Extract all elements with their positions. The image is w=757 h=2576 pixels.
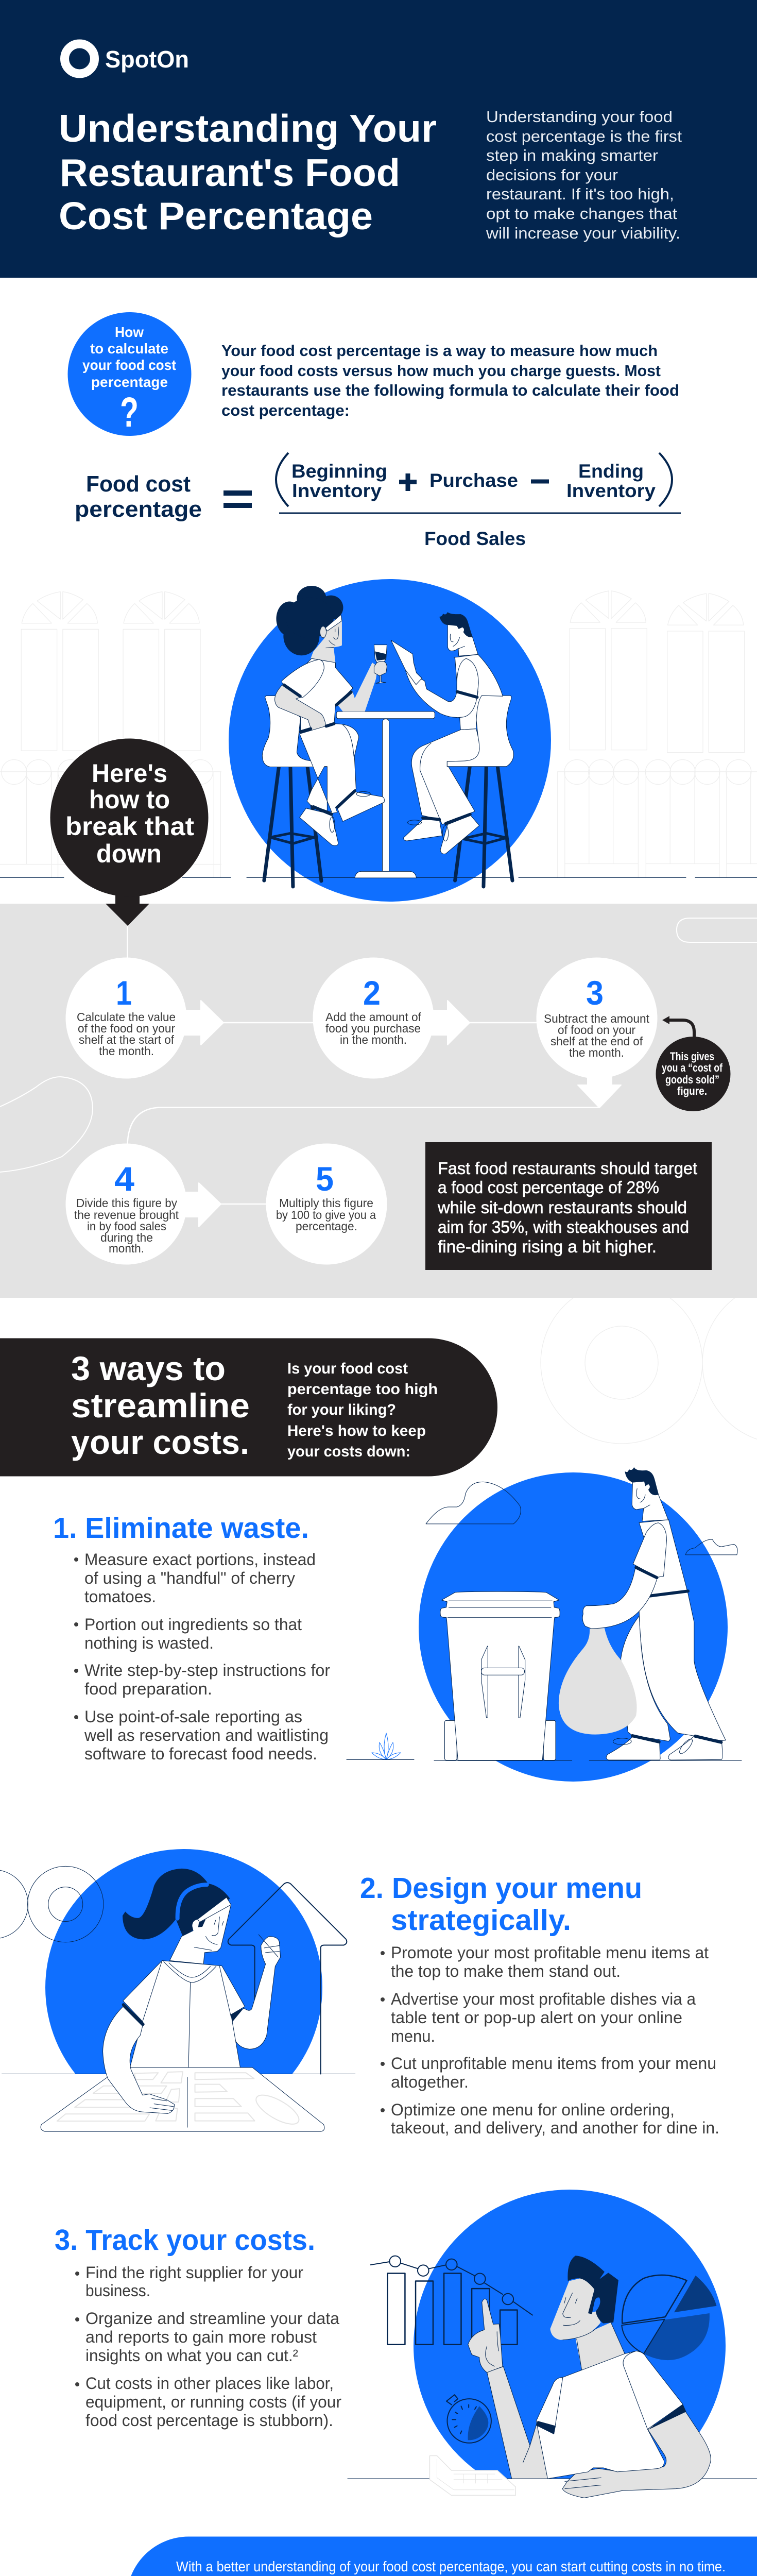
bullet list: eliminate waste (74, 1550, 330, 1763)
banner: 3 ways to streamline your costs: streamline (71, 1386, 250, 1425)
bullet list: design your menu: altogether. (391, 2073, 469, 2091)
bullet list: track your costs: food cost percentage is stubborn). (85, 2411, 333, 2430)
bullet list: design your menu: takeout, and delivery, and another for dine in. (391, 2119, 719, 2137)
bullet list: eliminate waste: Write step-by-step instructions for (84, 1661, 330, 1680)
banner: 3 ways to streamline your costs: Is your food cost (287, 1360, 408, 1377)
arrow: step 2 to 3 (430, 1001, 470, 1045)
bullet list: eliminate waste: tomatoes. (84, 1587, 156, 1606)
header intro text (486, 108, 682, 242)
arrow: step 3 to 4 (578, 1074, 621, 1108)
title: Restaurant's Food (60, 151, 400, 194)
callout: how to calculate: ? (120, 389, 139, 436)
step 3: the month. (569, 1046, 624, 1059)
bullet list: eliminate waste: Portion out ingredients so that (84, 1615, 302, 1634)
text block: formula intro (221, 342, 679, 419)
decoration: faint rings (541, 1282, 757, 1444)
chart: bars and trend line (371, 2256, 532, 2345)
step 1 (66, 957, 186, 1079)
bullet list: track your costs: insights on what you can cut.² (85, 2346, 298, 2365)
step 5: by 100 to give you a (276, 1208, 376, 1222)
step 2 (313, 957, 434, 1079)
callout: cost of goods sold: you a “cost of (662, 1061, 723, 1074)
heading: design your menu (360, 1872, 642, 1937)
callout: how to calculate (68, 312, 192, 436)
callout: here's how to break that down: down (96, 839, 162, 868)
step 4: 4 (114, 1160, 134, 1198)
bullet list: eliminate waste: of using a "handful" of cherry (84, 1569, 295, 1587)
bullet list: track your costs: business. (85, 2281, 150, 2300)
bullet list: design your menu: Cut unprofitable menu items from your menu (391, 2054, 716, 2073)
callout: how to calculate: your food cost (82, 357, 176, 373)
callout: here's how to break that down (50, 739, 208, 926)
header intro text: will increase your viability. (486, 224, 680, 242)
step 5: percentage. (296, 1219, 357, 1233)
bullet list: track your costs: and reports to gain more robust (85, 2328, 317, 2346)
step 3: Subtract the amount (544, 1012, 650, 1025)
formula: Food Sales (424, 528, 526, 549)
bullet list: track your costs: equipment, or running costs (if your (85, 2393, 341, 2411)
callout: cost of goods sold (656, 1016, 730, 1111)
banner: 3 ways to streamline your costs: for your liking? (287, 1401, 396, 1418)
callout box: target percentages: aim for 35%, with steakhouses and (438, 1217, 689, 1236)
heading: design your menu: strategically. (391, 1904, 571, 1937)
step 5 (266, 1144, 387, 1264)
formula: Inventory (566, 480, 656, 501)
header intro text: opt to make changes that (486, 205, 677, 223)
banner: 3 ways to streamline your costs (0, 1338, 497, 1477)
logo: SpotOn (65, 44, 189, 74)
bullet list: eliminate waste: food preparation. (84, 1680, 212, 1698)
formula (75, 453, 681, 549)
callout: cost of goods sold: This gives (670, 1050, 714, 1063)
step 4: Divide this figure by (76, 1196, 177, 1210)
callout box: target percentages: a food cost percentage of 28% (438, 1178, 659, 1197)
bullet list: eliminate waste: nothing is wasted. (84, 1634, 214, 1652)
bullet list: design your menu: menu. (391, 2027, 435, 2045)
header intro text: step in making smarter (486, 146, 658, 164)
formula: Food cost (86, 471, 191, 497)
woman (275, 586, 387, 845)
bullet list: track your costs (75, 2263, 341, 2430)
banner: 3 ways to streamline your costs: 3 ways to (71, 1349, 226, 1387)
step 5: 5 (316, 1160, 334, 1198)
text block: formula intro: restaurants use the following formula to calculate their food (221, 381, 679, 399)
step 4: during the (100, 1231, 153, 1244)
banner: 3 ways to streamline your costs: Here's how to keep (287, 1422, 426, 1439)
header intro text: restaurant. If it's too high, (486, 185, 674, 203)
header intro text: Understanding your food (486, 108, 673, 126)
callout: cost of goods sold: figure. (677, 1084, 707, 1097)
heading: eliminate waste: 1. Eliminate waste. (53, 1512, 309, 1545)
step 3: of food on your (558, 1023, 635, 1037)
callout: cost of goods sold: goods sold” (665, 1073, 719, 1086)
bullet list: eliminate waste: Measure exact portions, instead (84, 1550, 316, 1569)
heading: design your menu: 2. (360, 1872, 384, 1905)
step 2: Add the amount of (325, 1010, 422, 1024)
callout box: target percentages: fine-dining rising a bit higher. (438, 1237, 657, 1256)
title: Understanding Your (59, 107, 437, 150)
step 2: 2 (363, 974, 381, 1012)
callout: here's how to break that down: how to (89, 785, 170, 814)
step 4 (66, 1144, 186, 1264)
bullet list: design your menu: Promote your most profitable menu items at (391, 1943, 709, 1962)
header intro text: cost percentage is the first (486, 127, 682, 145)
figure: man (468, 2256, 711, 2498)
banner: 3 ways to streamline your costs: percentage too high (287, 1381, 438, 1398)
text block: formula intro: cost percentage: (221, 401, 350, 419)
header intro text: decisions for your (486, 166, 618, 184)
callout: how to calculate: percentage (91, 374, 168, 390)
bullet list: track your costs: Cut costs in other places like labor, (85, 2374, 334, 2393)
step 2: food you purchase (325, 1022, 421, 1035)
callout box: target percentages: Fast food restaurants should target (438, 1159, 697, 1178)
illustration: man with trash bag and bin (347, 1467, 742, 1782)
text block: formula intro: Your food cost percentage is a way to measure how much (221, 342, 658, 360)
callout box: target percentages (425, 1142, 712, 1270)
formula: percentage (75, 497, 202, 522)
call to action (127, 2537, 757, 2576)
formula: Beginning (291, 461, 387, 482)
callout: how to calculate: to calculate (90, 341, 168, 357)
step 4: the revenue brought (74, 1208, 179, 1222)
step 1: of the food on your (78, 1022, 175, 1035)
text block: formula intro: your food costs versus how much you charge guests. Most (221, 362, 661, 380)
callout: here's how to break that down: Here's (92, 759, 167, 788)
formula: Inventory (292, 480, 382, 501)
banner: 3 ways to streamline your costs: your costs. (71, 1423, 249, 1461)
bullet list: design your menu: the top to make them stand out. (391, 1962, 621, 1980)
logo: SpotOn: SpotOn (105, 46, 189, 73)
panel: header (0, 0, 757, 278)
bullet list: track your costs: Find the right supplier for your (85, 2263, 303, 2282)
illustration: couple at restaurant table (0, 579, 757, 902)
step 1: shelf at the start of (79, 1033, 175, 1046)
panel: step by step (0, 904, 757, 1298)
icon: stopwatch (446, 2395, 491, 2443)
step 5: Multiply this figure (279, 1196, 373, 1210)
step 3: shelf at the end of (550, 1035, 643, 1048)
step 1: the month. (99, 1044, 154, 1058)
chart: pie (622, 2275, 716, 2360)
step 2: in the month. (340, 1033, 407, 1046)
callout: here's how to break that down: break that (65, 812, 194, 841)
title: Cost Percentage (59, 194, 373, 238)
bullet list: eliminate waste: software to forecast food needs. (84, 1744, 317, 1763)
step 4: month. (109, 1242, 144, 1255)
bullet list: track your costs: Organize and streamline your data (85, 2309, 339, 2328)
callout: how to calculate: How (115, 324, 144, 340)
bullet list: design your menu (381, 1943, 719, 2137)
step 1: 1 (116, 974, 132, 1012)
background: restaurant windows and fence (0, 591, 757, 877)
callout box: target percentages: while sit-down restaurants should (437, 1198, 687, 1217)
formula: Purchase (429, 470, 518, 491)
bullet list: design your menu: Optimize one menu for online ordering, (391, 2100, 675, 2119)
title (59, 107, 437, 238)
arrow: step 4 to 5 (183, 1183, 221, 1227)
banner: 3 ways to streamline your costs: your costs down: (287, 1443, 410, 1460)
bullet list: design your menu: Advertise your most profitable dishes via a (391, 1990, 696, 2008)
formula: Ending (578, 461, 644, 482)
illustration: man pointing at charts (348, 2190, 757, 2502)
step 1: Calculate the value (77, 1010, 176, 1024)
heading: track your costs: 3. Track your costs. (55, 2224, 315, 2257)
step 3 (537, 957, 657, 1079)
step 4: in by food sales (87, 1219, 166, 1233)
arrow: step 1 to 2 (183, 1001, 223, 1045)
illustration: woman reading menu (0, 1849, 355, 2131)
step 3: 3 (586, 974, 604, 1012)
man (391, 612, 503, 854)
heading: design your menu: Design your menu (392, 1872, 642, 1905)
icon: keyboard (429, 2455, 515, 2495)
bullet list: design your menu: table tent or pop-up alert on your online (391, 2008, 682, 2027)
bullet list: eliminate waste: Use point-of-sale reporting as (84, 1707, 302, 1726)
bullet list: eliminate waste: well as reservation and waitlisting (84, 1726, 329, 1744)
